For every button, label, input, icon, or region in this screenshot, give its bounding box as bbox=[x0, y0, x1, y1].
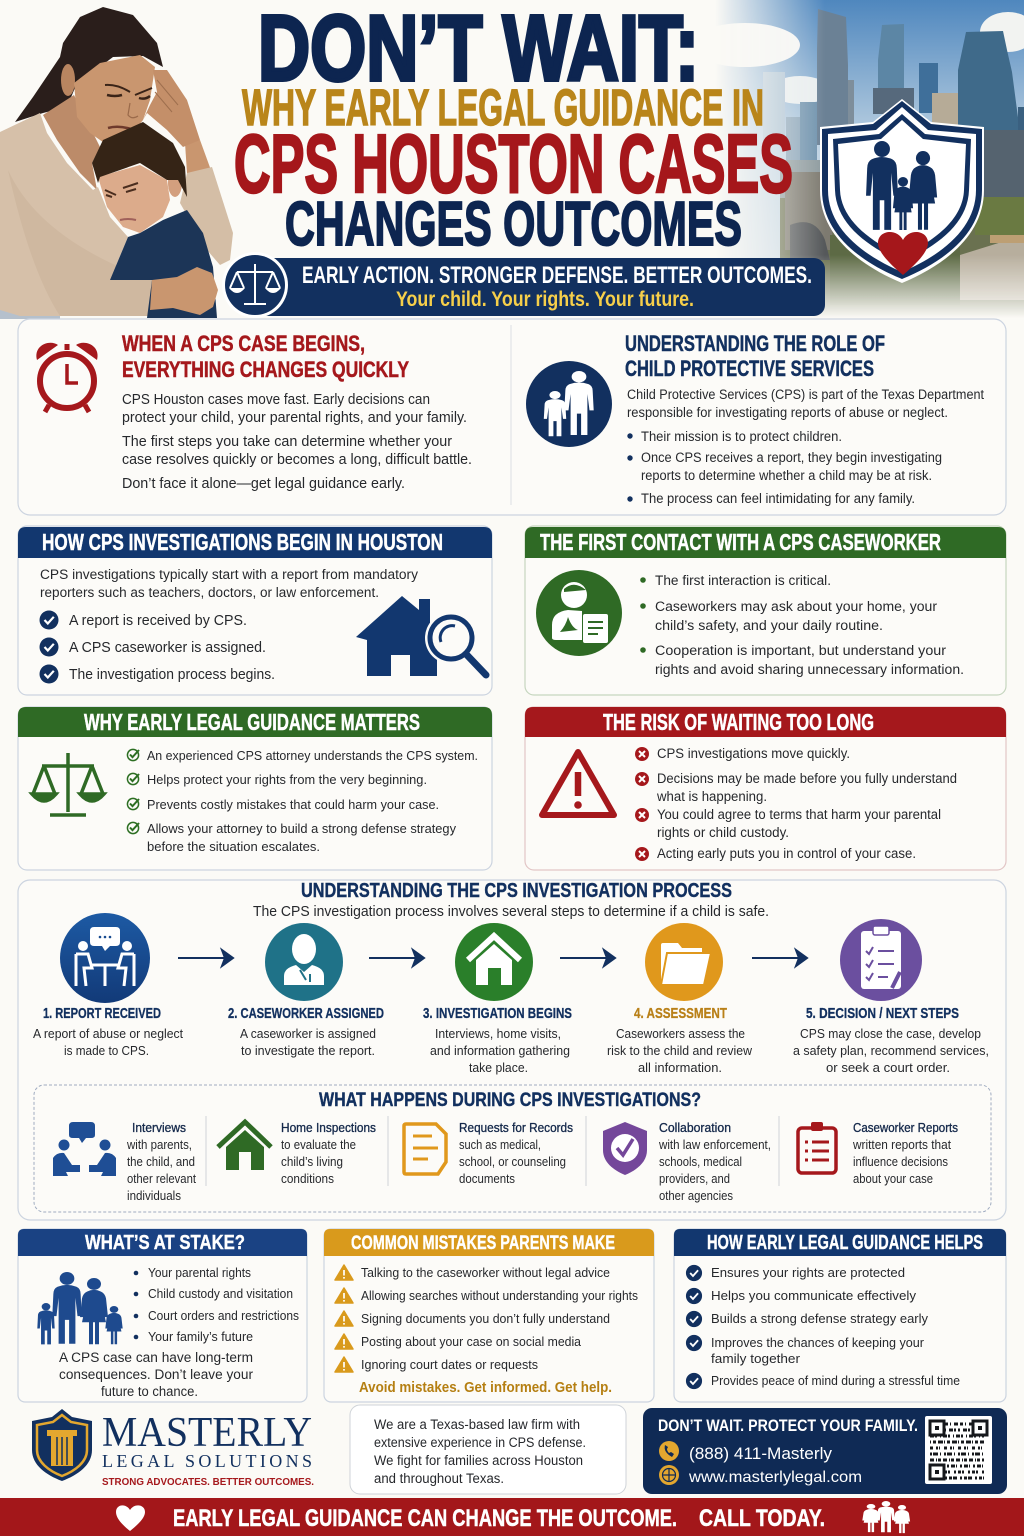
heading: EVERYTHING CHANGES QUICKLY bbox=[122, 357, 409, 382]
mother's neck bbox=[43, 95, 100, 190]
heading: COMMON MISTAKES PARENTS MAKE bbox=[351, 1233, 615, 1254]
text block: Your family’s future bbox=[148, 1330, 253, 1344]
icon: alarm clock bbox=[36, 343, 98, 412]
text block: A report is received by CPS. bbox=[69, 613, 247, 629]
text block: reports to determine whether a child may be at risk. bbox=[641, 468, 932, 483]
arrow bbox=[178, 950, 233, 966]
item: collaboration: providers, and bbox=[659, 1172, 730, 1186]
text block: Posting about your case on social media bbox=[361, 1335, 581, 1349]
icon: globe bbox=[659, 1465, 679, 1485]
heart bbox=[878, 232, 928, 275]
text block bbox=[122, 392, 472, 492]
panel: first contact with caseworker bbox=[525, 526, 1006, 695]
item: requests for records: school, or counseling bbox=[459, 1155, 566, 1169]
phone number: (888) 411-Masterly bbox=[689, 1444, 833, 1463]
arrow bbox=[560, 950, 615, 966]
sweater shading bbox=[8, 170, 152, 316]
text block: responsible for investigating reports of abuse or neglect. bbox=[627, 405, 948, 420]
text block: protect your child, your parental rights, and your family. bbox=[122, 410, 467, 426]
panel: what's at stake bbox=[18, 1229, 307, 1402]
panel: when a CPS case begins and role of CPS bbox=[18, 319, 1006, 515]
mother's raised hand bbox=[143, 70, 200, 147]
mother's hair bbox=[15, 7, 163, 122]
panel: why early legal guidance matters bbox=[18, 707, 492, 870]
mother's right sleeve bbox=[180, 167, 233, 265]
text block: Improves the chances of keeping your bbox=[711, 1336, 924, 1350]
heading: WHAT’S AT STAKE? bbox=[85, 1232, 245, 1254]
step 3: investigation begins bbox=[423, 923, 572, 1075]
item: interviews: the child, and bbox=[127, 1155, 195, 1169]
step 4: assessment bbox=[607, 923, 753, 1075]
icon: family bbox=[862, 1501, 910, 1533]
icon: family shield bbox=[820, 99, 984, 283]
icon: caseworker with clipboard bbox=[536, 570, 622, 656]
icon: family bbox=[37, 1272, 123, 1344]
text block: before the situation escalates. bbox=[147, 840, 320, 854]
photo: city skyline bbox=[720, 0, 1024, 315]
step 2: caseworker assigned: to investigate the report. bbox=[241, 1044, 375, 1058]
text block bbox=[640, 573, 964, 677]
step 5: decision / next steps: 5. DECISION / NEXT STEPS bbox=[806, 1005, 959, 1022]
text block: Don’t face it alone—get legal guidance early. bbox=[122, 476, 405, 492]
item: home inspections bbox=[218, 1121, 376, 1186]
text block: CPS Houston cases move fast. Early decisions can bbox=[122, 392, 430, 408]
panel: CPS investigation process bbox=[18, 880, 1006, 1220]
item: interviews: with parents, bbox=[126, 1138, 192, 1152]
heading: THE RISK OF WAITING TOO LONG bbox=[603, 709, 874, 735]
panel: about the firm: We are a Texas-based law firm with bbox=[374, 1417, 580, 1432]
item: interviews bbox=[53, 1121, 196, 1203]
text block: Ensures your rights are protected bbox=[711, 1266, 905, 1280]
step 3: investigation begins: take place. bbox=[469, 1061, 528, 1075]
background jeans bbox=[0, 310, 60, 319]
icon: warning triangle bbox=[542, 752, 614, 815]
footer call to action: CALL TODAY. bbox=[699, 1505, 825, 1532]
icon: scales of justice bbox=[222, 252, 288, 318]
step 1: report received bbox=[33, 913, 184, 1058]
step 4: assessment: all information. bbox=[638, 1061, 722, 1075]
boy's ear bbox=[168, 169, 182, 197]
panel: about the firm: extensive experience in CPS defense. bbox=[374, 1435, 586, 1450]
step 3: investigation begins: and information gathering bbox=[430, 1044, 570, 1058]
item: interviews: Interviews bbox=[132, 1121, 186, 1135]
text block bbox=[127, 749, 478, 854]
text block: Acting early puts you in control of your case. bbox=[657, 846, 916, 861]
icon: shield with column bbox=[32, 1409, 92, 1481]
text block: Child Protective Services (CPS) is part of the Texas Department bbox=[627, 387, 984, 402]
title bbox=[234, 0, 793, 259]
item: collaboration: Collaboration bbox=[659, 1121, 731, 1135]
text block: rights or child custody. bbox=[657, 825, 789, 840]
text block: The first interaction is critical. bbox=[655, 573, 831, 588]
item: caseworker reports: Caseworker Reports bbox=[853, 1121, 958, 1135]
step 5: decision / next steps: a safety plan, recommend services, bbox=[793, 1044, 989, 1058]
item: requests for records: Requests for Records bbox=[459, 1121, 573, 1135]
step 1: report received: A report of abuse or neglect bbox=[33, 1027, 184, 1041]
item: collaboration bbox=[603, 1121, 771, 1203]
text block: Caseworkers may ask about your home, your bbox=[655, 599, 938, 614]
text block: Child custody and visitation bbox=[148, 1287, 293, 1301]
step 2: caseworker assigned bbox=[228, 923, 384, 1058]
arrow bbox=[369, 950, 424, 966]
heading: WHY EARLY LEGAL GUIDANCE MATTERS bbox=[84, 709, 420, 735]
item: home inspections: Home Inspections bbox=[281, 1121, 376, 1135]
title line 4: CHANGES OUTCOMES bbox=[285, 190, 742, 259]
panel: about the firm: We fight for families across Houston bbox=[374, 1453, 583, 1468]
item: caseworker reports: influence decisions bbox=[853, 1155, 948, 1169]
arrow bbox=[752, 950, 807, 966]
text block bbox=[40, 567, 418, 684]
text block: Decisions may be made before you fully understand bbox=[657, 771, 957, 786]
text block bbox=[627, 387, 984, 506]
mother's hand on boy bbox=[150, 267, 218, 315]
item: collaboration: with law enforcement, bbox=[658, 1138, 771, 1152]
text block: rights and avoid sharing unnecessary information. bbox=[655, 662, 964, 677]
text block bbox=[335, 1265, 638, 1372]
website: www.masterlylegal.com bbox=[688, 1469, 862, 1486]
panel: about the firm bbox=[350, 1405, 626, 1494]
step 5: decision / next steps: CPS may close the case, develop bbox=[800, 1027, 981, 1041]
panel: the risk of waiting too long bbox=[525, 707, 1006, 870]
item: requests for records: such as medical, bbox=[459, 1138, 541, 1152]
mother's sweater bbox=[0, 113, 152, 316]
panel: what happens during CPS investigations bbox=[34, 1085, 991, 1212]
text block bbox=[635, 746, 957, 861]
text block: Court orders and restrictions bbox=[148, 1309, 299, 1323]
item: interviews: other relevant bbox=[127, 1172, 196, 1186]
text block: Helps you communicate effectively bbox=[711, 1289, 917, 1303]
heading: CHILD PROTECTIVE SERVICES bbox=[625, 356, 874, 381]
text block: future to chance. bbox=[101, 1384, 198, 1399]
text block bbox=[59, 1266, 299, 1399]
panel: common mistakes parents make bbox=[324, 1229, 654, 1402]
boy's face bbox=[98, 165, 170, 233]
panel: how CPS investigations begin bbox=[18, 526, 492, 695]
text block: family together bbox=[711, 1352, 800, 1366]
item: requests for records bbox=[404, 1121, 573, 1186]
heading: WHAT HAPPENS DURING CPS INVESTIGATIONS? bbox=[319, 1090, 701, 1111]
step 3: investigation begins: 3. INVESTIGATION BEGINS bbox=[423, 1005, 572, 1022]
text block: The investigation process begins. bbox=[69, 667, 275, 683]
text block bbox=[686, 1265, 960, 1389]
callout: Avoid mistakes. Get informed. Get help. bbox=[359, 1380, 612, 1396]
logo: Masterly Legal Solutions bbox=[32, 1409, 314, 1488]
logo wordmark: MASTERLY bbox=[102, 1410, 312, 1456]
panel: contact bbox=[643, 1408, 1007, 1494]
photo: worried mother hugging child bbox=[0, 7, 233, 319]
step 2: caseworker assigned: A caseworker is assigned bbox=[240, 1027, 376, 1041]
contact heading: DON’T WAIT. PROTECT YOUR FAMILY. bbox=[658, 1416, 918, 1435]
text block: A CPS caseworker is assigned. bbox=[69, 640, 266, 656]
panel: how early legal guidance helps bbox=[674, 1229, 1006, 1402]
text block: Allowing searches without understanding your rights bbox=[361, 1289, 638, 1303]
text block: Allows your attorney to build a strong defense strategy bbox=[147, 822, 457, 836]
heading: HOW CPS INVESTIGATIONS BEGIN IN HOUSTON bbox=[42, 529, 443, 555]
item: collaboration: other agencies bbox=[659, 1189, 733, 1203]
mother's facial features bbox=[105, 85, 152, 129]
text block: Ignoring court dates or requests bbox=[361, 1358, 538, 1372]
text block: A CPS case can have long-term bbox=[59, 1350, 253, 1365]
text block: Your parental rights bbox=[148, 1266, 251, 1280]
boy's hair bbox=[92, 122, 187, 197]
subheading: The CPS investigation process involves several steps to determine if a child is safe. bbox=[253, 904, 769, 920]
step 4: assessment: Caseworkers assess the bbox=[616, 1027, 745, 1041]
item: caseworker reports: written reports that bbox=[852, 1138, 951, 1152]
text block: what is happening. bbox=[656, 789, 767, 804]
text block: You could agree to terms that harm your parental bbox=[657, 807, 941, 822]
mother's ear bbox=[61, 64, 75, 96]
item: requests for records: documents bbox=[459, 1172, 515, 1186]
step 1: report received: is made to CPS. bbox=[64, 1044, 149, 1058]
text block: Helps protect your rights from the very beginning. bbox=[147, 773, 427, 787]
hand finger lines bbox=[155, 80, 178, 112]
text block: The process can feel intimidating for any family. bbox=[641, 491, 915, 506]
item: home inspections: to evaluate the bbox=[281, 1138, 356, 1152]
mother's face bbox=[74, 55, 155, 147]
boy's facial features bbox=[105, 183, 138, 220]
step 2: caseworker assigned: 2. CASEWORKER ASSIGNED bbox=[228, 1005, 384, 1022]
heading: WHEN A CPS CASE BEGINS, bbox=[122, 331, 365, 356]
text block: Signing documents you don’t fully understand bbox=[361, 1312, 610, 1326]
icon: house and magnifier bbox=[356, 596, 486, 676]
heading bbox=[122, 331, 409, 382]
tagline text: EARLY ACTION. STRONGER DEFENSE. BETTER OUTCOMES. bbox=[302, 262, 812, 289]
text block: CPS investigations typically start with a report from mandatory bbox=[40, 567, 418, 582]
item: interviews: individuals bbox=[127, 1189, 181, 1203]
item: home inspections: child’s living bbox=[281, 1155, 343, 1169]
item: home inspections: conditions bbox=[281, 1172, 334, 1186]
heading: UNDERSTANDING THE ROLE OF bbox=[625, 331, 885, 356]
heading: UNDERSTANDING THE CPS INVESTIGATION PROCESS bbox=[301, 880, 732, 902]
text block: The first steps you take can determine whether your bbox=[122, 434, 452, 450]
text block: CPS investigations move quickly. bbox=[657, 746, 850, 761]
text block: An experienced CPS attorney understands the CPS system. bbox=[147, 749, 478, 763]
tagline subtext: Your child. Your rights. Your future. bbox=[396, 288, 694, 311]
logo tagline: STRONG ADVOCATES. BETTER OUTCOMES. bbox=[102, 1476, 314, 1488]
step 4: assessment: risk to the child and review bbox=[607, 1044, 753, 1058]
text block: case resolves quickly or becomes a long, difficult battle. bbox=[122, 452, 472, 468]
icon: heart bbox=[116, 1505, 145, 1531]
tagline banner bbox=[222, 252, 825, 318]
step 5: decision / next steps bbox=[793, 919, 989, 1075]
text block: Prevents costly mistakes that could harm your case. bbox=[147, 798, 439, 812]
step 4: assessment: 4. ASSESSMENT bbox=[634, 1005, 727, 1022]
text block: consequences. Don’t leave your bbox=[59, 1367, 254, 1382]
QR code bbox=[925, 1416, 992, 1484]
text block: Once CPS receives a report, they begin investigating bbox=[641, 450, 942, 465]
text block: reporters such as teachers, doctors, or law enforcement. bbox=[40, 585, 379, 600]
step 3: investigation begins: Interviews, home visits, bbox=[435, 1027, 561, 1041]
text block: Builds a strong defense strategy early bbox=[711, 1312, 929, 1326]
text block: Cooperation is important, but understand your bbox=[655, 643, 947, 658]
footer text: EARLY LEGAL GUIDANCE CAN CHANGE THE OUTCOME. bbox=[173, 1505, 677, 1532]
text block: Talking to the caseworker without legal advice bbox=[361, 1266, 610, 1280]
logo subtitle: LEGAL SOLUTIONS bbox=[102, 1451, 312, 1471]
panel: about the firm: and throughout Texas. bbox=[374, 1471, 504, 1486]
heading bbox=[625, 331, 885, 381]
boy's shirt bbox=[110, 210, 217, 318]
icon: scales bbox=[32, 753, 104, 815]
footer bar bbox=[0, 1498, 1024, 1536]
text block: Provides peace of mind during a stressful time bbox=[711, 1374, 960, 1388]
text block: Their mission is to protect children. bbox=[641, 429, 842, 444]
icon: parent and child bbox=[526, 361, 612, 447]
step 1: report received: 1. REPORT RECEIVED bbox=[43, 1005, 161, 1022]
icon: phone bbox=[659, 1441, 679, 1461]
step 5: decision / next steps: or seek a court order. bbox=[826, 1061, 950, 1075]
item: caseworker reports bbox=[798, 1121, 958, 1186]
mother's forearm bbox=[185, 140, 212, 180]
text block: child’s safety, and your daily routine. bbox=[655, 618, 883, 633]
item: collaboration: schools, medical bbox=[659, 1155, 742, 1169]
item: caseworker reports: about your case bbox=[853, 1172, 933, 1186]
